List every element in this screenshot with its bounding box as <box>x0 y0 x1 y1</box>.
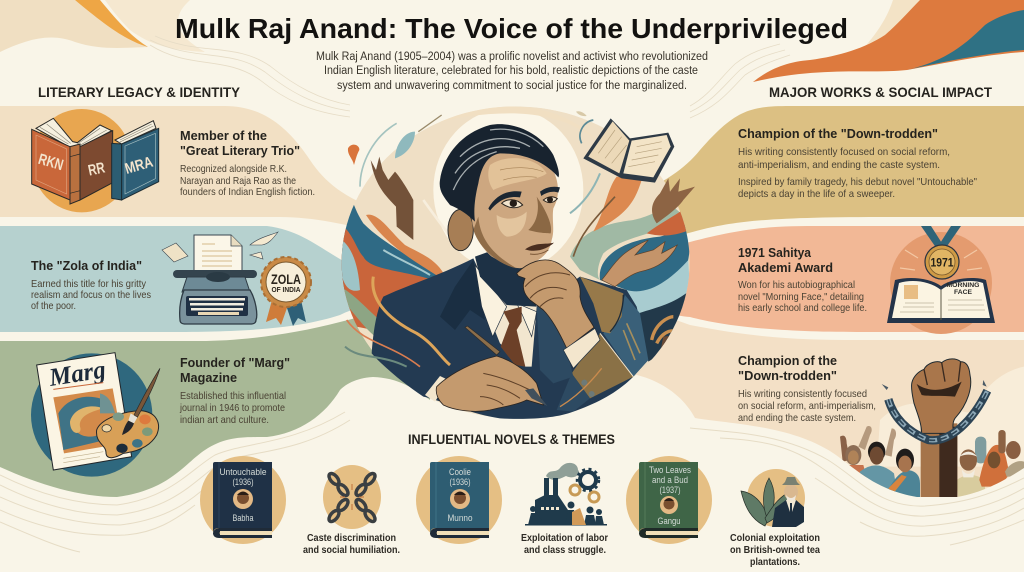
panel text: of the poor. <box>31 300 76 312</box>
icon: tea leaves and colonial man <box>741 469 805 527</box>
icon: book two leaves and a bud: and a Bud <box>652 475 688 485</box>
panel: champion of the down-trodden, fist <box>636 320 1024 497</box>
icon: book two leaves and a bud <box>626 456 712 544</box>
icon: typewriter <box>162 232 278 324</box>
intro paragraph: Indian English literature, celebrated for his bold, realistic depictions of the caste <box>324 65 698 77</box>
icon: zola badge: ZOLA <box>271 271 301 287</box>
panel text: on social reform, anti-imperialism, <box>738 400 876 412</box>
icon: three books <box>32 109 159 212</box>
panel heading: Akademi Award <box>738 260 833 275</box>
top-left decorative waves <box>0 0 790 118</box>
caption: colonial: plantations. <box>750 557 800 568</box>
panel text: anti-imperialism, and ending the caste system. <box>738 159 940 171</box>
panel heading: 1971 Sahitya <box>738 245 812 260</box>
raised hand, left <box>371 157 413 240</box>
caption: caste: Caste discrimination <box>307 533 396 544</box>
icon: book coolie: Munno <box>448 513 472 523</box>
panel: zola of india <box>0 226 430 332</box>
panel text: Inspired by family tragedy, his debut novel "Untouchable" <box>738 176 977 188</box>
panel text: Earned this title for his gritty <box>31 278 147 290</box>
chain <box>888 391 987 440</box>
panel text: indian art and culture. <box>180 414 269 426</box>
icon: marg magazine and palette: Marg <box>46 355 108 392</box>
icon: book two leaves and a bud: (1937) <box>660 485 681 495</box>
decorative wave lines <box>0 412 1024 552</box>
icon: medal and open book: 1971 <box>930 256 954 270</box>
panel heading <box>180 355 290 385</box>
panel text: Won for his autobiographical <box>738 279 855 291</box>
caption: caste <box>303 533 400 556</box>
panel: great literary trio <box>0 106 430 250</box>
icon: three books: MRA <box>123 154 155 178</box>
icon: factory and workers <box>525 463 607 526</box>
icon: zola badge <box>261 257 311 326</box>
panel text: and ending the caste system. <box>738 412 856 424</box>
icon: three books: RKN <box>36 151 65 174</box>
panel text: His writing consistently focused <box>738 388 867 400</box>
panel text: journal in 1946 to promote <box>179 402 285 414</box>
floating open book <box>583 118 674 183</box>
ear <box>448 209 473 251</box>
panel: sahitya akademi award <box>620 226 1024 334</box>
icon: book coolie <box>416 456 502 544</box>
central portrait <box>340 106 695 419</box>
icon: book two leaves and a bud: Gangu <box>658 516 680 526</box>
open hand, right <box>602 240 677 287</box>
icon: book untouchable <box>200 456 286 544</box>
icon: book untouchable: Untouchable <box>220 467 266 477</box>
panel text: depicts a day in the life of a sweeper. <box>738 188 895 200</box>
heading: influential novels: INFLUENTIAL NOVELS & THEMES <box>408 431 615 447</box>
caption: colonial <box>730 533 820 568</box>
intro paragraph: Mulk Raj Anand (1905–2004) was a prolific novelist and activist who revolutionized <box>316 51 708 63</box>
panel heading: The "Zola of India" <box>31 258 142 273</box>
panel heading <box>738 245 833 275</box>
panel heading: "Great Literary Trio" <box>180 143 300 158</box>
icon: three books: RR <box>87 159 106 180</box>
panel text <box>738 279 867 314</box>
panel text: founders of Indian English fiction. <box>180 186 315 198</box>
icon: medal and open book: MORNING <box>946 282 980 289</box>
heading: literary legacy: LITERARY LEGACY & IDENTITY <box>38 84 241 100</box>
panel text: Recognized alongside R.K. <box>180 163 287 175</box>
swirling background <box>340 106 690 418</box>
panel heading: Champion of the "Down-trodden" <box>738 126 938 141</box>
caption: labor <box>521 533 608 556</box>
icon: zola badge: OF INDIA <box>272 287 300 294</box>
panel text: realism and focus on the lives <box>31 289 151 301</box>
icon: book untouchable: Babha <box>232 513 254 523</box>
heading: major works: MAJOR WORKS & SOCIAL IMPACT <box>769 84 992 100</box>
top-right decorative wave <box>753 0 1024 82</box>
hand with pen <box>425 326 547 411</box>
panel heading <box>738 353 837 383</box>
panel text <box>31 278 151 312</box>
caption: labor: and class struggle. <box>524 545 606 556</box>
novels and themes row <box>200 456 820 568</box>
hand on chin <box>517 260 600 368</box>
shirt, collar and tie <box>475 265 537 367</box>
panel text: his early school and college life. <box>738 302 867 314</box>
panel text <box>180 163 315 198</box>
icon: medal and open book: FACE <box>954 289 973 296</box>
panel heading: Member of the <box>180 128 267 143</box>
suit <box>372 258 648 419</box>
icon: book untouchable: (1936) <box>232 477 254 487</box>
icon: book coolie: Coolie <box>449 467 471 477</box>
panel heading: Magazine <box>180 370 237 385</box>
panel text <box>179 390 286 426</box>
panel text <box>738 388 876 424</box>
intro paragraph: system and unwavering commitment to social justice for the marginalized. <box>337 80 687 92</box>
icon: book coolie: (1936) <box>450 477 471 487</box>
intro paragraph <box>316 51 708 92</box>
suit details and flowing streaks <box>345 260 648 412</box>
fist <box>912 359 971 433</box>
caption: colonial: Colonial exploitation <box>730 533 820 544</box>
caption: labor: Exploitation of labor <box>521 533 608 544</box>
raised arm <box>921 423 957 498</box>
neck shadow <box>475 250 537 307</box>
icon: fist, chain and crowd <box>840 359 1024 500</box>
panel text <box>738 146 977 200</box>
panel: marg magazine <box>0 300 430 497</box>
panel text: Established this influential <box>180 390 286 402</box>
icon: book two leaves and a bud: Two Leaves <box>649 465 691 475</box>
icon: marg magazine and palette <box>31 353 160 477</box>
icon: medal and open book <box>887 226 995 334</box>
panel heading: Founder of "Marg" <box>180 355 290 370</box>
panel heading <box>180 128 300 158</box>
panel text: Narayan and Raja Rao as the <box>180 175 296 187</box>
caption: colonial: on British-owned tea <box>730 545 820 556</box>
raised hand, upper right <box>652 178 695 223</box>
crowd <box>840 426 1024 500</box>
panel: champion of the down-trodden, top <box>610 106 1024 245</box>
icon: broken chains <box>323 465 381 529</box>
floating droplets <box>348 111 593 187</box>
panel heading: Champion of the <box>738 353 837 368</box>
panel text: novel "Morning Face," detailing <box>738 291 864 303</box>
panel heading: "Down-trodden" <box>738 368 837 383</box>
title: Mulk Raj Anand: The Voice of the Underprivileged <box>175 13 848 44</box>
panel text: His writing consistently focused on social reform, <box>738 146 950 158</box>
caption: caste: and social humiliation. <box>303 545 400 556</box>
hair <box>440 124 559 222</box>
face <box>470 151 560 268</box>
